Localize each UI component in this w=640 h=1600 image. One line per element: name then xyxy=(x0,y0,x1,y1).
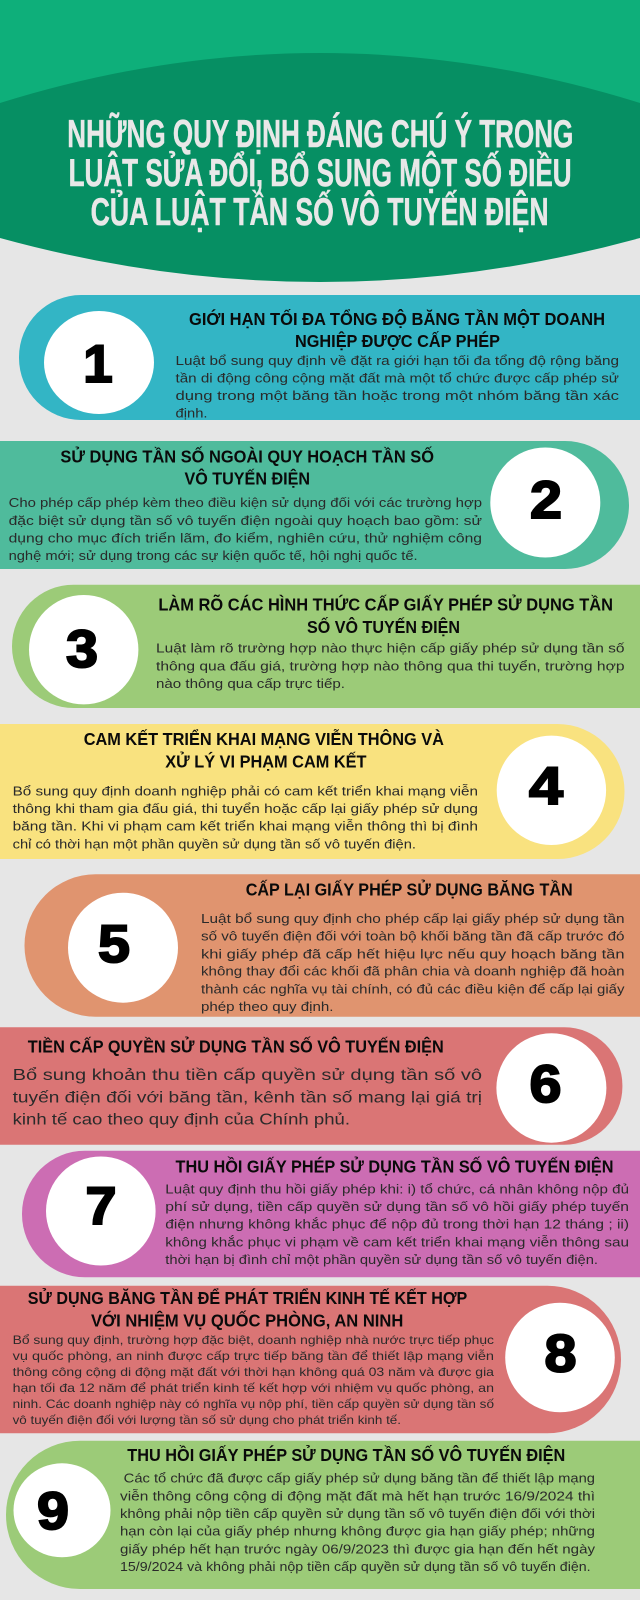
body 2: nghệ mới; sử dụng trong các sự kiện quốc tế, hội nghị quốc tế. xyxy=(9,549,418,563)
body 8: ninh. Các doanh nghiệp này có nghĩa vụ nộp phí, tiền cấp quyền sử dụng tần số xyxy=(13,1398,495,1411)
heading 2 xyxy=(60,445,434,488)
panel 8 xyxy=(0,1286,621,1433)
heading 7: THU HỒI GIẤY PHÉP SỬ DỤNG TẦN SỐ VÔ TUYẾN ĐIỆN xyxy=(176,1155,614,1176)
body 8: vô tuyến điện đối với lượng tần số sử dụng cho phát triển kinh tế. xyxy=(13,1414,401,1427)
header banner xyxy=(0,0,640,282)
circle 8 xyxy=(505,1303,615,1412)
number 5: 5 xyxy=(98,915,130,974)
heading 3: LÀM RÕ CÁC HÌNH THỨC CẤP GIẤY PHÉP SỬ DỤNG TẦN xyxy=(158,594,613,615)
body 3 xyxy=(156,642,625,691)
body 6 xyxy=(13,1066,482,1129)
heading 8: SỬ DỤNG BĂNG TẦN ĐỂ PHÁT TRIỂN KINH TẾ KẾT HỢP xyxy=(28,1287,468,1308)
heading 8 xyxy=(28,1287,468,1331)
body 6: tuyến điện đối với băng tần, kênh tần số mang lại giá trị xyxy=(13,1089,482,1106)
body 5: số vô tuyến điện đối với toàn bộ khối băng tần đã cấp trước đó xyxy=(201,930,625,944)
body 3: thông qua đấu giá, trường hợp nào thông qua thi tuyển, trường hợp xyxy=(156,659,625,673)
heading 3: SỐ VÔ TUYẾN ĐIỆN xyxy=(307,616,460,637)
heading 4: XỬ LÝ VI PHẠM CAM KẾT xyxy=(165,750,367,771)
body 1: Luật bổ sung quy định về đặt ra giới hạn tối đa tổng độ rộng băng xyxy=(176,354,619,368)
body 9: viễn thông công cộng di động mặt đất mà hết hạn trước 16/9/2024 thì xyxy=(120,1488,595,1503)
body 7: điện nhưng không khắc phục để nộp đủ trong thời hạn 12 tháng ; ii) xyxy=(165,1217,629,1232)
body 8: vụ quốc phòng, an ninh được cấp trực tiếp băng tần để thiết lập mạng viễn xyxy=(13,1350,494,1363)
number 1: 1 xyxy=(83,335,113,394)
heading 6: TIỀN CẤP QUYỀN SỬ DỤNG TẦN SỐ VÔ TUYẾN ĐIỆN xyxy=(28,1036,444,1057)
title xyxy=(67,112,573,234)
heading 4: CAM KẾT TRIỂN KHAI MẠNG VIỄN THÔNG VÀ xyxy=(84,728,444,749)
heading 5: CẤP LẠI GIẤY PHÉP SỬ DỤNG BĂNG TẦN xyxy=(246,878,573,899)
number 3: 3 xyxy=(66,620,98,679)
number 8: 8 xyxy=(544,1324,576,1384)
body 7 xyxy=(165,1182,629,1267)
circle 3 xyxy=(29,595,138,704)
heading 9: THU HỒI GIẤY PHÉP SỬ DỤNG TẦN SỐ VÔ TUYẾN ĐIỆN xyxy=(127,1444,565,1465)
heading 2: VÔ TUYẾN ĐIỆN xyxy=(184,467,310,488)
body 8: thông công cộng di động mặt đất với thời hạn không quá 03 năm và được gia xyxy=(13,1366,495,1379)
body 9: không phải nộp tiền cấp quyền sử dụng tần số vô tuyến điện đối với thời xyxy=(120,1507,595,1521)
body 7: phí sử dụng, tiền cấp quyền sử dụng tần số vô hồi giấy phép tuyến xyxy=(165,1200,629,1214)
body 8 xyxy=(13,1334,495,1427)
heading 2: SỬ DỤNG TẦN SỐ NGOÀI QUY HOẠCH TẦN SỐ xyxy=(60,445,434,466)
body 2: đặc biệt sử dụng tần số vô tuyến điện ngoài quy hoạch bao gồm: sử xyxy=(9,514,482,528)
body 3: Luật làm rõ trường hợp nào thực hiện cấp giấy phép sử dụng tần số xyxy=(156,642,625,656)
panel 2 xyxy=(0,441,629,569)
body 4: băng tần. Khi vi phạm cam kết triển khai mạng viễn thông thì bị đình xyxy=(13,819,478,834)
body 9 xyxy=(120,1472,596,1574)
circle 7 xyxy=(46,1156,156,1266)
body 9: Các tổ chức đã được cấp giấy phép sử dụng băng tần để thiết lập mạng xyxy=(124,1472,595,1486)
heading 1: GIỚI HẠN TỐI ĐA TỔNG ĐỘ BĂNG TẦN MỘT DOANH xyxy=(189,308,605,329)
body 4: Bổ sung quy định doanh nghiệp phải có cam kết triển khai mạng viễn xyxy=(13,783,478,798)
circle 4 xyxy=(497,736,606,845)
number 6: 6 xyxy=(530,1055,562,1114)
number 9: 9 xyxy=(37,1482,69,1541)
body 5: khi giấy phép đã cấp hết hiệu lực nếu quy hoạch băng tần xyxy=(201,947,625,961)
circle 2 xyxy=(490,448,600,558)
body 7: thời hạn bị đình chỉ một phần quyền sử dụng tần số vô tuyến điện. xyxy=(165,1253,598,1267)
panel 7 xyxy=(22,1151,640,1277)
heading 8: VỚI NHIỆM VỤ QUỐC PHÒNG, AN NINH xyxy=(91,1310,403,1331)
body 6: kinh tế cao theo quy định của Chính phủ. xyxy=(13,1112,350,1129)
panel 1 xyxy=(19,295,640,421)
body 2 xyxy=(9,496,482,563)
panel 5 xyxy=(24,874,640,1017)
body 9: hạn còn lại của giấy phép nhưng không được gia hạn giấy phép; những xyxy=(120,1525,595,1539)
body 1 xyxy=(176,354,619,421)
body 5 xyxy=(201,912,625,1014)
body 1: định. xyxy=(176,407,208,421)
circle 9 xyxy=(14,1463,110,1557)
body 7: Luật quy định thu hồi giấy phép khi: i) tổ chức, cá nhân không nộp đủ xyxy=(165,1182,629,1196)
body 4: thông khi tham gia đấu giá, thi tuyển hoặc cấp lại giấy phép sử dụng xyxy=(13,802,478,816)
heading 4 xyxy=(84,728,444,771)
body 2: Cho phép cấp phép kèm theo điều kiện sử dụng đối với các trường hợp xyxy=(9,496,482,510)
panel 9 xyxy=(6,1441,640,1589)
number 4: 4 xyxy=(529,757,564,816)
number 7: 7 xyxy=(86,1177,116,1236)
heading 1 xyxy=(189,308,605,351)
number 2: 2 xyxy=(530,471,562,530)
panel 6 xyxy=(0,1027,622,1145)
body 5: thành các nghĩa vụ tài chính, có đủ các điều kiện để cấp lại giấy xyxy=(201,982,625,996)
body 5: Luật bổ sung quy định cho phép cấp lại giấy phép sử dụng tần xyxy=(201,912,625,926)
panel 3 xyxy=(12,585,640,708)
body 5: không thay đổi các khối đã phân chia và doanh nghiệp đã hoàn xyxy=(201,965,625,979)
body 5: phép theo quy định. xyxy=(201,1000,334,1014)
body 2: dụng cho mục đích triển lãm, đo kiểm, nghiên cứu, thử nghiệm công xyxy=(9,532,482,546)
heading 3 xyxy=(158,594,613,637)
circle 1 xyxy=(44,311,154,414)
body 8: Bổ sung quy định, trường hợp đặc biệt, doanh nghiệp nhà nước trực tiếp phục xyxy=(13,1334,494,1347)
body 9: giấy phép hết hạn trước ngày 06/9/2023 thì được gia hạn đến hết ngày xyxy=(120,1542,596,1556)
circle 6 xyxy=(496,1033,606,1143)
body 4: chỉ có thời hạn một phần quyền sử dụng tần số vô tuyến điện. xyxy=(13,837,416,851)
body 3: nào thông qua cấp trực tiếp. xyxy=(156,677,345,691)
panel 4 xyxy=(0,724,624,859)
body 7: không khắc phục vi phạm về cam kết triển khai mạng viễn thông sau xyxy=(165,1234,629,1249)
circle 5 xyxy=(68,893,178,1003)
body 1: tần di động công cộng mặt đất mà một tổ chức được cấp phép sử xyxy=(176,372,619,386)
body 6: Bổ sung khoản thu tiền cấp quyền sử dụng tần số vô xyxy=(13,1066,482,1084)
body 8: hạn tối đa 12 năm để phát triển kinh tế kết hợp với nhiệm vụ quốc phòng, an xyxy=(13,1382,494,1395)
body 1: dụng trong một băng tần hoặc trong một nhóm băng tần xác xyxy=(176,389,619,403)
body 4 xyxy=(13,783,478,851)
body 9: 15/9/2024 và không phải nộp tiền cấp quyền sử dụng tần số vô tuyến điện. xyxy=(120,1560,591,1574)
heading 1: NGHIỆP ĐƯỢC CẤP PHÉP xyxy=(295,330,500,351)
